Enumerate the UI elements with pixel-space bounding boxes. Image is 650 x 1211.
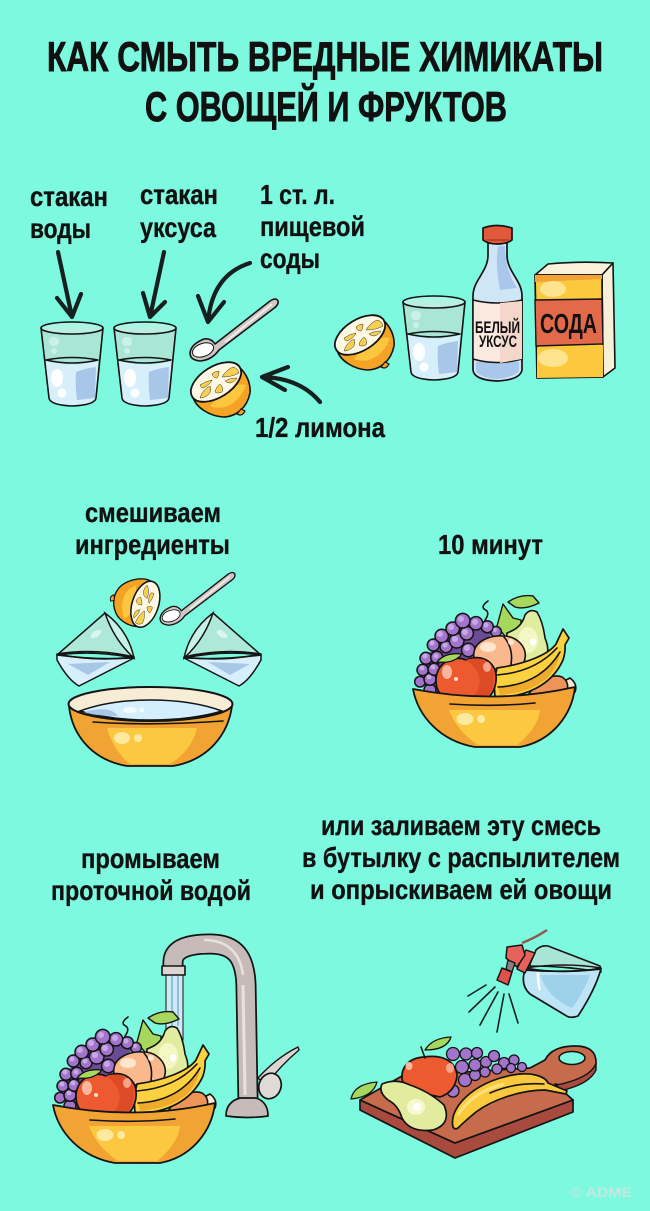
label: glass of water: стакан — [30, 181, 108, 212]
label: baking soda spoon: 1 ст. л. — [260, 179, 335, 210]
label: rinse under running water: проточной водой — [51, 875, 251, 906]
grapes on board — [446, 1048, 526, 1097]
arrow: to water glass — [57, 252, 81, 317]
icon: cutting board with fruit — [351, 1037, 596, 1158]
title — [47, 33, 603, 130]
arrow: to spoon — [198, 263, 250, 322]
icon: fruit bowl, soaking — [413, 596, 576, 747]
label: glass of water — [30, 181, 108, 244]
icon: half lemon — [184, 354, 250, 417]
icon: spoon falling — [160, 572, 235, 625]
icon: lemon, right group — [328, 307, 394, 370]
label: rinse under running water: промываем — [81, 843, 220, 874]
label: glass of water: воды — [30, 213, 91, 244]
icon: spoon — [190, 299, 278, 361]
icon: vinegar glass — [114, 322, 176, 406]
icon: fruit bowl under faucet — [53, 1012, 216, 1163]
box text: СОДА — [540, 308, 597, 339]
label: baking soda spoon: соды — [260, 243, 320, 274]
watermark: © ADME — [570, 1184, 632, 1200]
label: baking soda spoon: пищевой — [260, 211, 365, 242]
label: glass of vinegar: стакан — [140, 179, 218, 210]
apple on board — [402, 1056, 457, 1097]
icon: white vinegar bottle — [473, 226, 522, 381]
icon: left tilted glass — [57, 613, 134, 686]
label: spray alternative — [302, 810, 620, 905]
icon: faucet with water — [162, 940, 299, 1118]
banana on board — [452, 1074, 567, 1129]
icon: spray bottle — [468, 930, 601, 1032]
icon: lemon falling — [104, 564, 181, 641]
icon: glass, right group — [403, 296, 465, 380]
pear on board — [381, 1081, 446, 1130]
label: half lemon: 1/2 лимона — [255, 412, 385, 443]
label: ten minutes: 10 минут — [438, 529, 543, 560]
label: mix ingredients: ингредиенты — [75, 529, 230, 560]
icon: soda box — [535, 262, 615, 378]
label: spray alternative: или заливаем эту смесь — [321, 810, 601, 841]
label: rinse under running water — [51, 843, 251, 906]
label: glass of vinegar: уксуса — [140, 212, 216, 243]
label: baking soda spoon — [260, 179, 365, 274]
arrow: to vinegar glass — [143, 252, 165, 317]
icon: water glass — [41, 322, 103, 406]
bottle label text: БЕЛЫЙ — [475, 318, 520, 337]
label: glass of vinegar — [140, 179, 218, 243]
label: mix ingredients: смешиваем — [85, 497, 221, 528]
label: mix ingredients — [75, 497, 230, 560]
icon: right tilted glass — [184, 613, 261, 686]
spray lines — [468, 985, 518, 1032]
title: С ОВОЩЕЙ И ФРУКТОВ — [145, 82, 507, 130]
icon: white vinegar bottle: УКСУС — [479, 332, 517, 351]
icon: mixing bowl with water — [68, 687, 232, 766]
arrow: to lemon — [262, 367, 320, 402]
